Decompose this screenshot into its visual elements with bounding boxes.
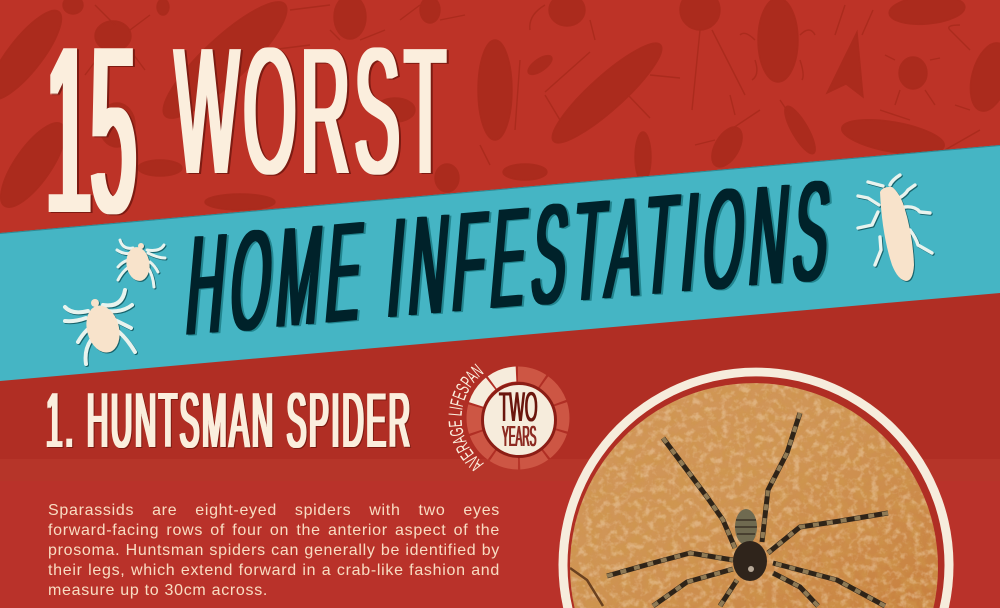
icon: small tick	[117, 240, 165, 287]
body section background	[0, 481, 1000, 608]
spider abdomen	[735, 509, 757, 545]
title word: WORST: WORST	[175, 10, 446, 211]
body text: Sparassids are eight-eyed spiders with two eyes	[48, 502, 500, 519]
gauge caption: AVERAGE LIFESPAN: AVERAGE LIFESPAN	[448, 364, 484, 472]
banner heading: HOME INFESTATIONS: HOME INFESTATIONS	[181, 150, 835, 366]
gauge centre disc	[482, 384, 556, 456]
title number: 15: 15	[46, 0, 136, 263]
body text: their legs, which extend forward in a crab-like fashion and	[48, 562, 500, 579]
lower section background	[0, 290, 1000, 608]
rock crack	[570, 568, 603, 606]
gauge ring: two filled segments	[457, 357, 579, 479]
teal diagonal banner	[0, 145, 1000, 381]
spider photo	[560, 380, 950, 608]
gauge value: TWO: TWO	[499, 383, 538, 430]
spider eyes	[748, 566, 754, 572]
lifespan gauge	[448, 364, 570, 472]
spider legs	[607, 413, 888, 606]
body text: measure up to 30cm across.	[48, 582, 268, 599]
lower section stripe	[0, 459, 1000, 481]
body text: prosoma. Huntsman spiders can generally be identified by	[48, 542, 500, 559]
icon: cream roach	[858, 175, 932, 281]
gauge unit: YEARS: YEARS	[502, 420, 536, 453]
icon: large tick	[65, 290, 135, 364]
body text: forward-facing rows of four on the anterior aspect of the	[48, 522, 500, 539]
rock surface	[560, 380, 950, 608]
section heading: 1. HUNTSMAN SPIDER: 1. HUNTSMAN SPIDER	[46, 377, 410, 464]
body text	[48, 502, 500, 599]
spider abdomen markings	[735, 520, 757, 534]
background: insect silhouette pattern	[0, 0, 1000, 216]
title: 15 WORST	[46, 0, 446, 263]
gauge ring: unfilled segments	[474, 374, 562, 462]
rock highlights	[560, 380, 950, 608]
spider cephalothorax	[733, 541, 767, 581]
rock texture	[560, 380, 950, 608]
photo frame ring	[558, 368, 954, 608]
